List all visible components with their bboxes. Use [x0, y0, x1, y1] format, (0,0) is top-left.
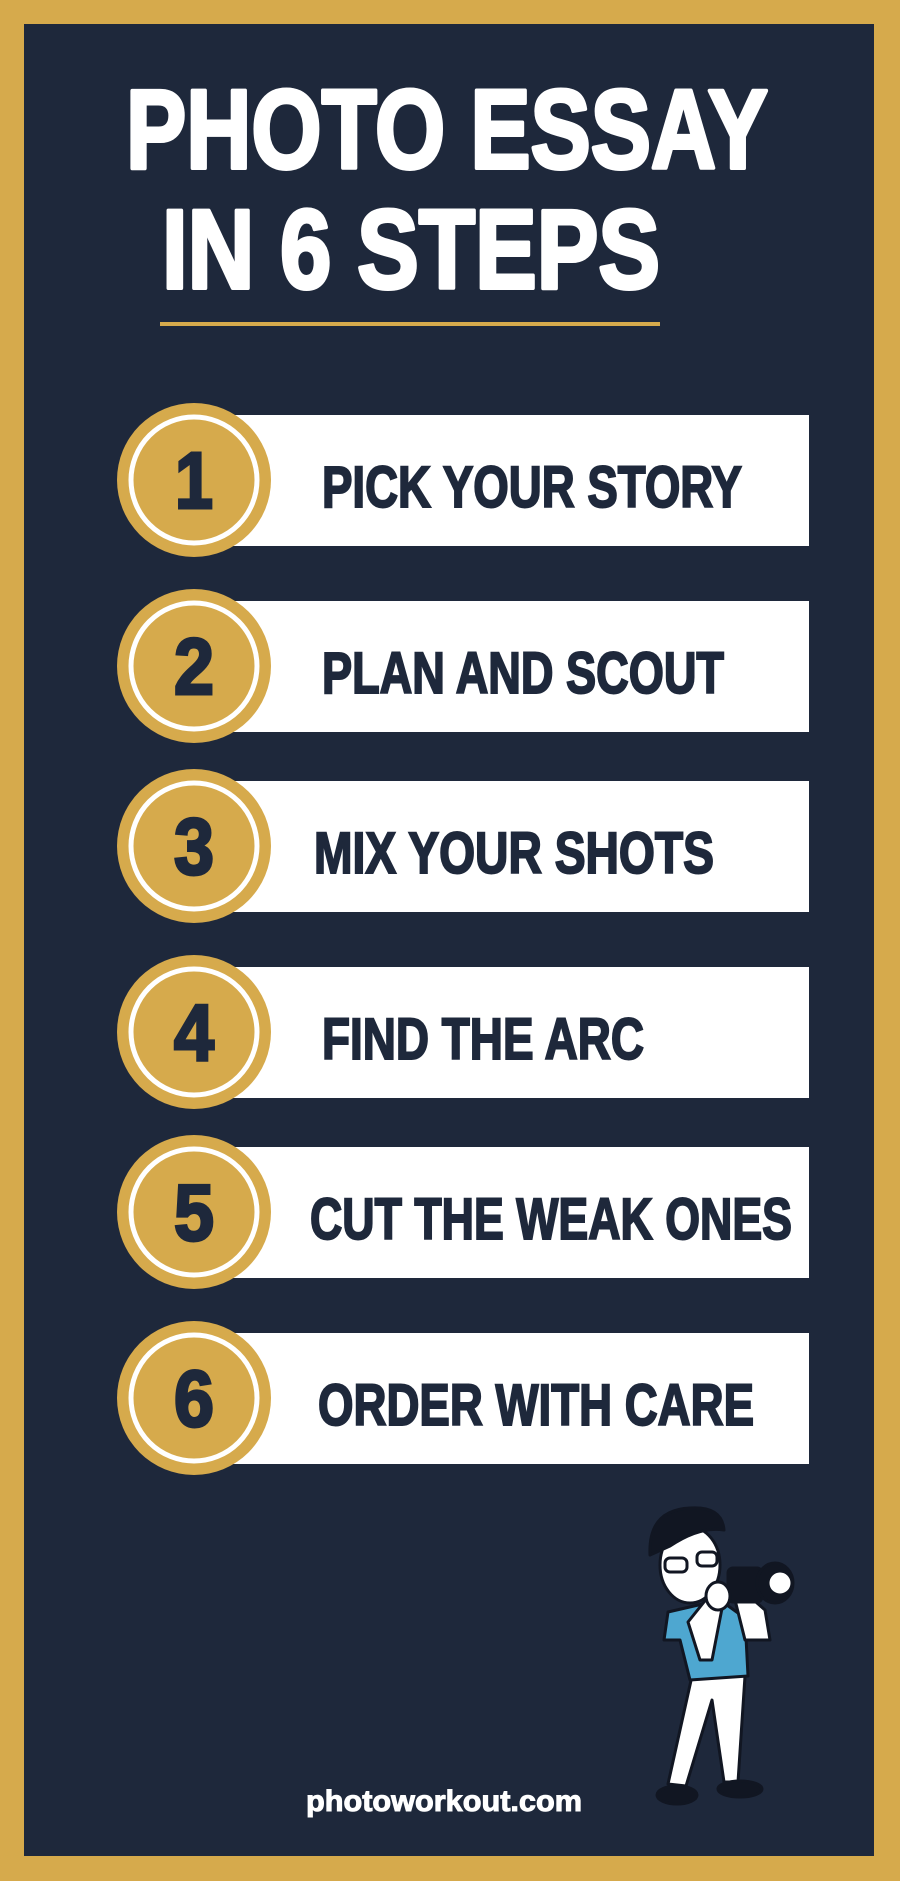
- step 4: 4: [174, 988, 214, 1077]
- step 6: [117, 1321, 809, 1475]
- title underline: [160, 322, 660, 326]
- step 6: ORDER WITH CARE: [318, 1373, 754, 1438]
- step 3: [117, 769, 809, 923]
- title: [126, 67, 768, 312]
- title: IN 6 STEPS: [162, 187, 660, 312]
- step 6: 6: [174, 1354, 214, 1443]
- icon: photographer illustration: [650, 1508, 793, 1804]
- step 1: [117, 403, 809, 557]
- step 1: PICK YOUR STORY: [322, 455, 742, 520]
- step 2: [117, 589, 809, 743]
- footer: website: photoworkout.com: [306, 1785, 582, 1818]
- step 2: PLAN AND SCOUT: [322, 641, 724, 706]
- step 3: 3: [174, 802, 214, 891]
- step 1: 1: [175, 436, 213, 525]
- step 2: 2: [174, 622, 214, 711]
- step 3: MIX YOUR SHOTS: [314, 821, 714, 886]
- title: PHOTO ESSAY: [126, 67, 768, 192]
- step 5: 5: [174, 1168, 214, 1257]
- step 4: [117, 955, 809, 1109]
- step 5: [117, 1135, 809, 1289]
- step 4: FIND THE ARC: [322, 1007, 644, 1072]
